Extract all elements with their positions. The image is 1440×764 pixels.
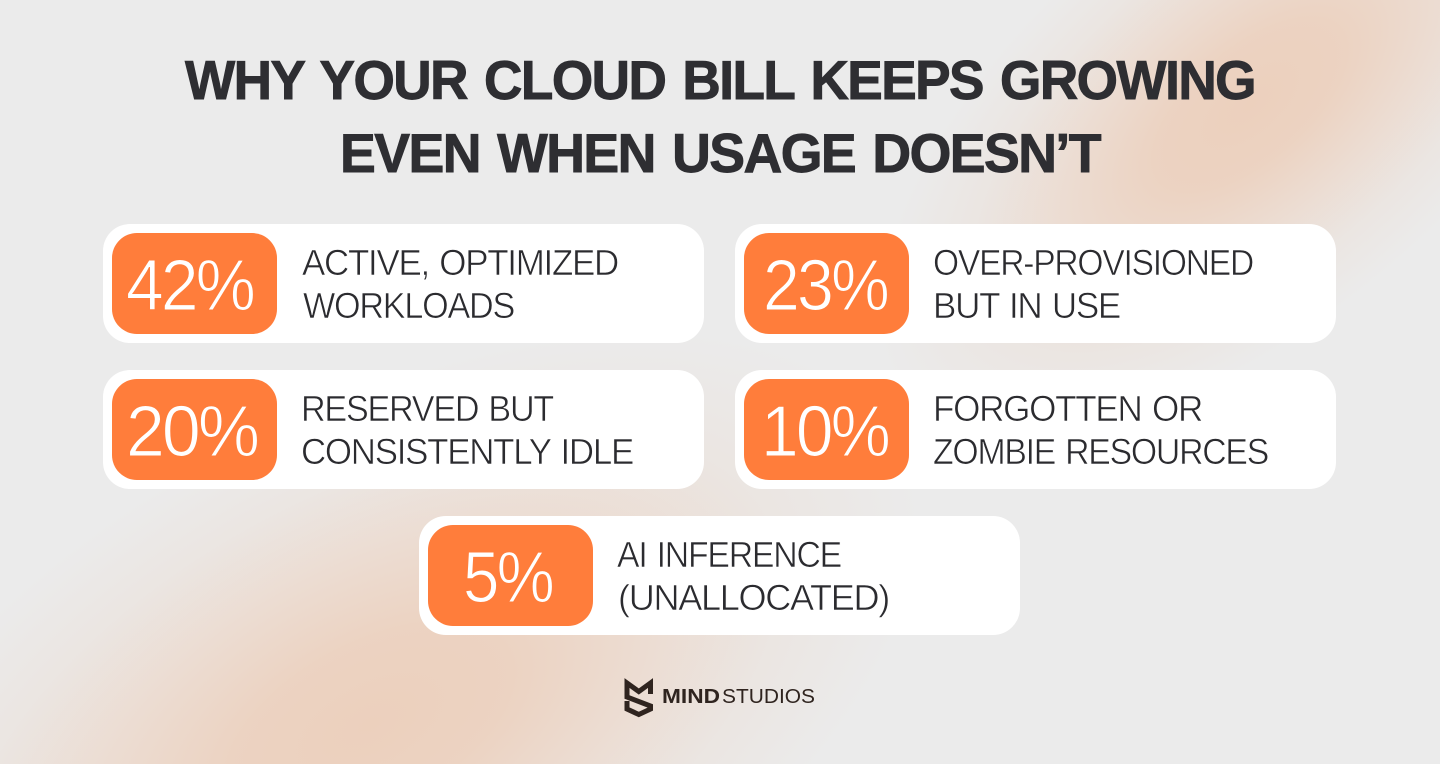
label: forgotten or zombie resources: ZOMBIE RESOURCES bbox=[933, 431, 1268, 472]
title: EVEN WHEN USAGE DOESN’T bbox=[340, 122, 1101, 184]
wordmark: MIND STUDIOS bbox=[662, 686, 815, 708]
percentage badge: 10% bbox=[744, 379, 909, 480]
percentage badge: 42% bbox=[112, 233, 277, 334]
percentage badge: 23%: 23% bbox=[763, 246, 888, 326]
label: over-provisioned but in use: OVER-PROVISIONED bbox=[933, 242, 1253, 283]
label: forgotten or zombie resources bbox=[933, 388, 1268, 472]
label: reserved but consistently idle: CONSISTENTLY IDLE bbox=[301, 431, 633, 472]
title bbox=[185, 49, 1255, 184]
percentage badge: 23% bbox=[744, 233, 909, 334]
panel: 42% active, optimized workloads bbox=[103, 224, 704, 343]
percentage badge: 5% bbox=[428, 525, 593, 626]
label: AI inference (unallocated) bbox=[617, 534, 889, 618]
percentage badge: 20%: 20% bbox=[126, 392, 258, 472]
panel: 10% forgotten or zombie resources bbox=[735, 370, 1336, 489]
label: reserved but consistently idle bbox=[301, 388, 633, 472]
percentage badge: 10%: 10% bbox=[761, 392, 889, 472]
label: active, optimized workloads bbox=[302, 242, 618, 326]
label: forgotten or zombie resources: FORGOTTEN OR bbox=[933, 388, 1202, 429]
label: reserved but consistently idle: RESERVED BUT bbox=[301, 388, 554, 429]
percentage badge: 5%: 5% bbox=[463, 538, 553, 618]
icon: Mind Studios shield mark bbox=[627, 683, 650, 714]
panel: 20% reserved but consistently idle bbox=[103, 370, 704, 489]
label: active, optimized workloads: ACTIVE, OPTIMIZED bbox=[302, 242, 618, 283]
label: AI inference (unallocated): (UNALLOCATED) bbox=[618, 577, 889, 618]
percentage badge: 42%: 42% bbox=[126, 246, 254, 326]
title: WHY YOUR CLOUD BILL KEEPS GROWING bbox=[185, 49, 1255, 111]
percentage badge: 20% bbox=[112, 379, 277, 480]
label: over-provisioned but in use: BUT IN USE bbox=[933, 285, 1120, 326]
logo: Mind Studios bbox=[627, 683, 815, 714]
panel: 23% over-provisioned but in use bbox=[735, 224, 1336, 343]
label: over-provisioned but in use bbox=[933, 242, 1253, 326]
panel: 5% AI inference (unallocated) bbox=[419, 516, 1020, 635]
label: active, optimized workloads: WORKLOADS bbox=[303, 285, 514, 326]
label: AI inference (unallocated): AI INFERENCE bbox=[617, 534, 841, 575]
